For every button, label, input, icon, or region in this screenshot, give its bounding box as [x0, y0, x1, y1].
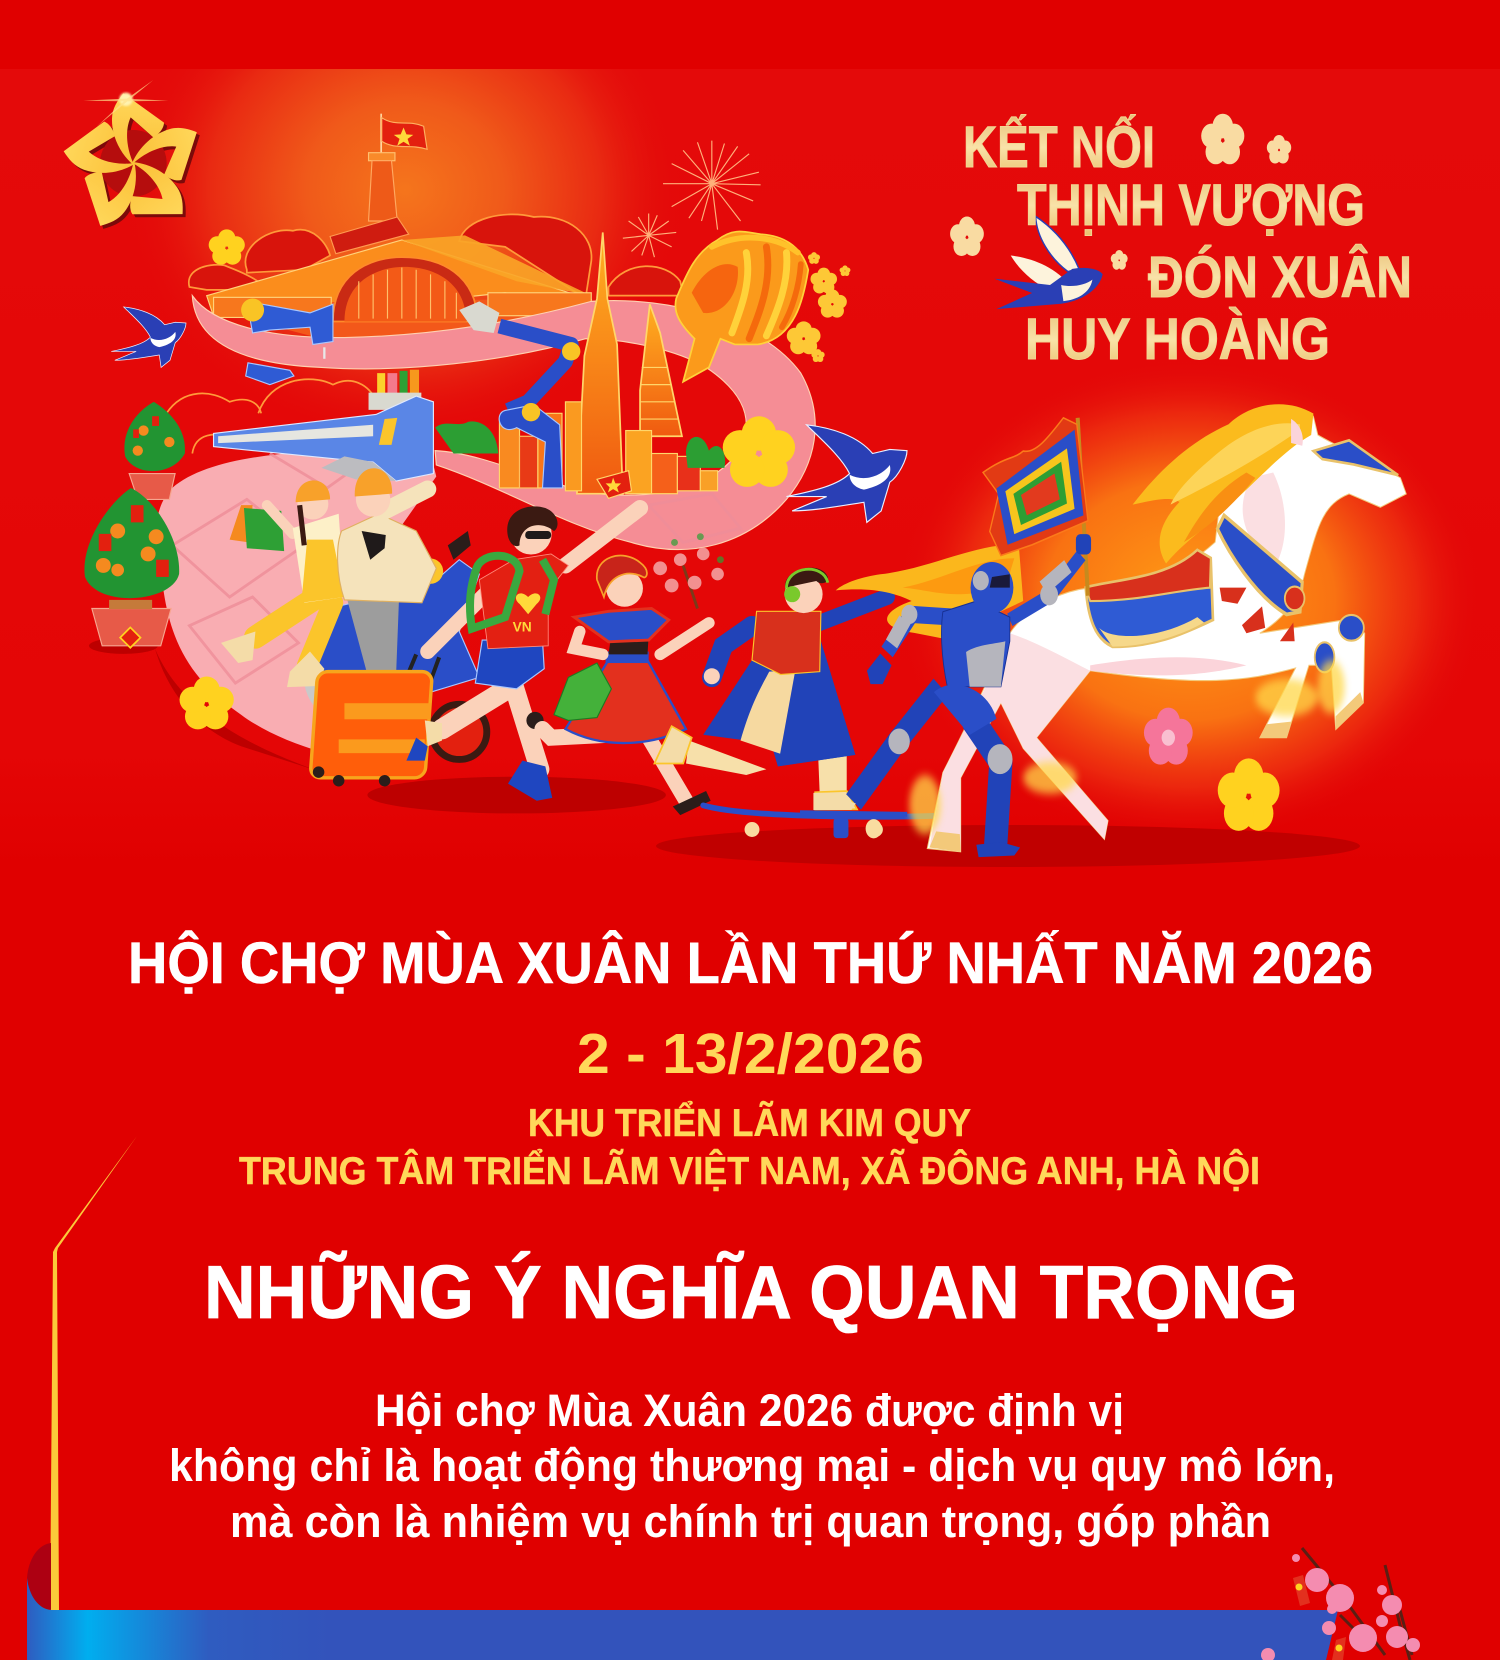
illustration backdrop	[0, 69, 1500, 822]
flower: yellow lower left	[180, 676, 234, 729]
intro paragraph: không chỉ là hoạt động thương mại - dịch vụ quy mô lớn,	[169, 1440, 1335, 1491]
ground shadow under horse and robot	[656, 825, 1360, 867]
suitcase	[310, 654, 439, 786]
slogan: HUY HOÀNG	[1025, 307, 1330, 372]
intro paragraph	[169, 1385, 1335, 1547]
ribbon fold	[27, 1543, 51, 1610]
slogan: THỊNH VƯỢNG	[1017, 173, 1365, 238]
blue band	[27, 1578, 1338, 1660]
skater in ao dai	[654, 568, 953, 838]
hall	[207, 235, 591, 344]
dragon	[675, 231, 808, 382]
slogan: ĐÓN XUÂN	[1148, 245, 1412, 310]
right illustration: horse and robot	[800, 114, 1406, 857]
horse tail	[836, 545, 1023, 639]
venue	[239, 1100, 1260, 1193]
horse body	[927, 416, 1406, 852]
ribbon: upper band and right loop	[192, 296, 815, 550]
blossom branches	[1261, 1548, 1420, 1660]
fireworks	[623, 141, 761, 257]
sewing machine	[241, 299, 333, 385]
section heading: NHỮNG Ý NGHĨA QUAN TRỌNG	[204, 1250, 1298, 1334]
ground shadows	[89, 638, 666, 813]
logo: gold five-petal flower	[60, 80, 212, 241]
robot arm	[459, 301, 580, 488]
saddle	[1086, 550, 1213, 647]
venue: TRUNG TÂM TRIỂN LÃM VIỆT NAM, XÃ ĐÔNG ANH, HÀ NỘI	[239, 1148, 1260, 1193]
apricot blossoms	[787, 252, 850, 362]
main title: HỘI CHỢ MÙA XUÂN LẦN THỨ NHẤT NĂM 2026	[128, 931, 1373, 996]
running man: VN	[513, 619, 532, 634]
large yellow flower	[723, 416, 795, 487]
flowers: pink and yellow	[1144, 708, 1280, 831]
dates: 2 - 13/2/2026	[577, 1022, 924, 1086]
mane	[1133, 404, 1313, 564]
slogan: KẾT NỐI	[963, 115, 1155, 180]
city skyline	[435, 232, 725, 498]
horse harness	[1217, 419, 1398, 672]
intro paragraph: mà còn là nhiệm vụ chính trị quan trọng, góp phần	[230, 1496, 1271, 1547]
flag tower	[330, 114, 427, 254]
hoof sparks	[909, 660, 1345, 834]
flower: yellow top left	[209, 229, 245, 265]
robot	[800, 534, 1091, 857]
yellow frame line	[50, 1136, 137, 1610]
large tree	[84, 488, 179, 648]
ribbon: lower band	[156, 451, 436, 752]
clouds	[166, 214, 683, 453]
slogan	[963, 115, 1412, 372]
couple on scooter	[221, 468, 487, 759]
swallow left	[111, 307, 186, 367]
venue: KHU TRIỂN LÃM KIM QUY	[528, 1100, 971, 1145]
intro paragraph: Hội chợ Mùa Xuân 2026 được định vị	[375, 1385, 1124, 1436]
flag	[983, 418, 1088, 596]
cream blossoms	[950, 114, 1291, 270]
woman in ethnic dress	[542, 533, 724, 815]
running man	[406, 506, 640, 801]
left illustration: city ribbon and people	[84, 114, 953, 838]
small tree	[124, 402, 185, 499]
ribbon diamonds	[172, 453, 741, 683]
loom machine	[214, 370, 433, 481]
swallow right of ribbon	[786, 425, 907, 522]
white swallow	[994, 216, 1103, 309]
